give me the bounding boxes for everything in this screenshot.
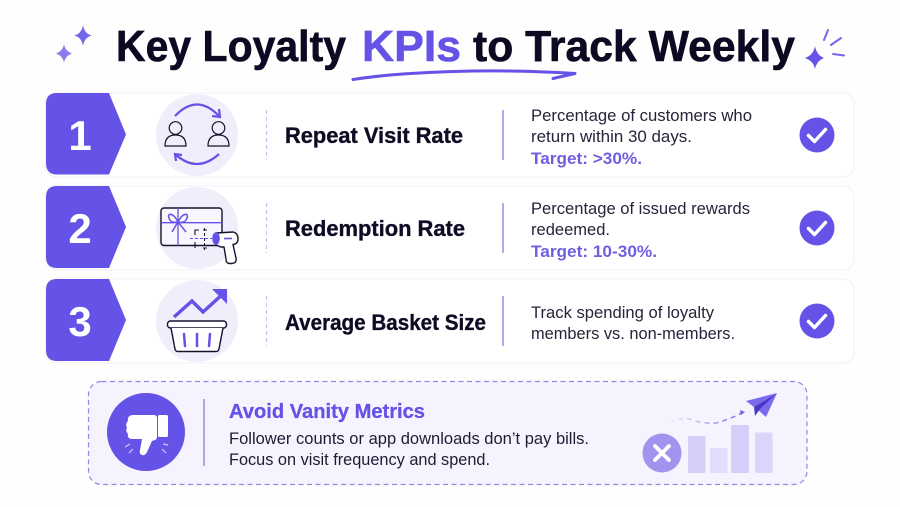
KPI name: Repeat Visit Rate [285,123,463,148]
description: redeemed. [531,221,610,239]
description: Percentage of issued rewards [531,200,750,218]
panel: KPI 3 Average Basket Size [46,279,854,363]
bar chart with paper plane [642,393,777,473]
callout text: Focus on visit frequency and spend. [229,451,490,469]
title: to Track Weekly [473,22,796,71]
callout heading: Avoid Vanity Metrics [229,401,425,423]
title underline swoosh [353,71,575,80]
icon: basket with rising arrow [156,280,238,362]
title: Key Loyalty [116,22,346,71]
callout text [229,430,589,469]
number badge 3 [46,279,126,361]
number badge 1 [46,93,126,174]
icon: gift card scanner [156,187,238,269]
description: Track spending of loyalty [531,304,715,322]
icon: check [800,118,834,152]
icon: left sparkles [56,25,92,63]
description: Target: 10-30%. [531,243,657,261]
icon: right sparkle and rays [805,30,844,69]
icon: check [800,210,834,246]
number badge 3: 3 [68,298,92,345]
description: members vs. non-members. [531,325,735,343]
title: KPIs [362,22,461,71]
KPI name: Average Basket Size [285,310,486,335]
description [531,304,735,343]
number badge 2 [46,186,126,268]
KPI name: Redemption Rate [285,216,465,241]
number badge 2: 2 [68,205,92,252]
icon: repeat customers [156,94,238,176]
panel: KPI 2 Redemption Rate [46,186,854,270]
icon: check [800,304,834,338]
description [531,200,750,261]
callout text: Follower counts or app downloads don’t pay bills. [229,430,589,448]
number badge 1: 1 [68,112,92,159]
description: Target: >30%. [531,150,642,168]
description: Percentage of customers who [531,107,752,125]
panel: KPI 1 Repeat Visit Rate [46,93,854,177]
description [531,107,752,168]
panel: avoid vanity metrics callout [88,382,807,484]
title [116,22,796,71]
icon: thumbs down [107,393,185,471]
description: return within 30 days. [531,128,692,146]
